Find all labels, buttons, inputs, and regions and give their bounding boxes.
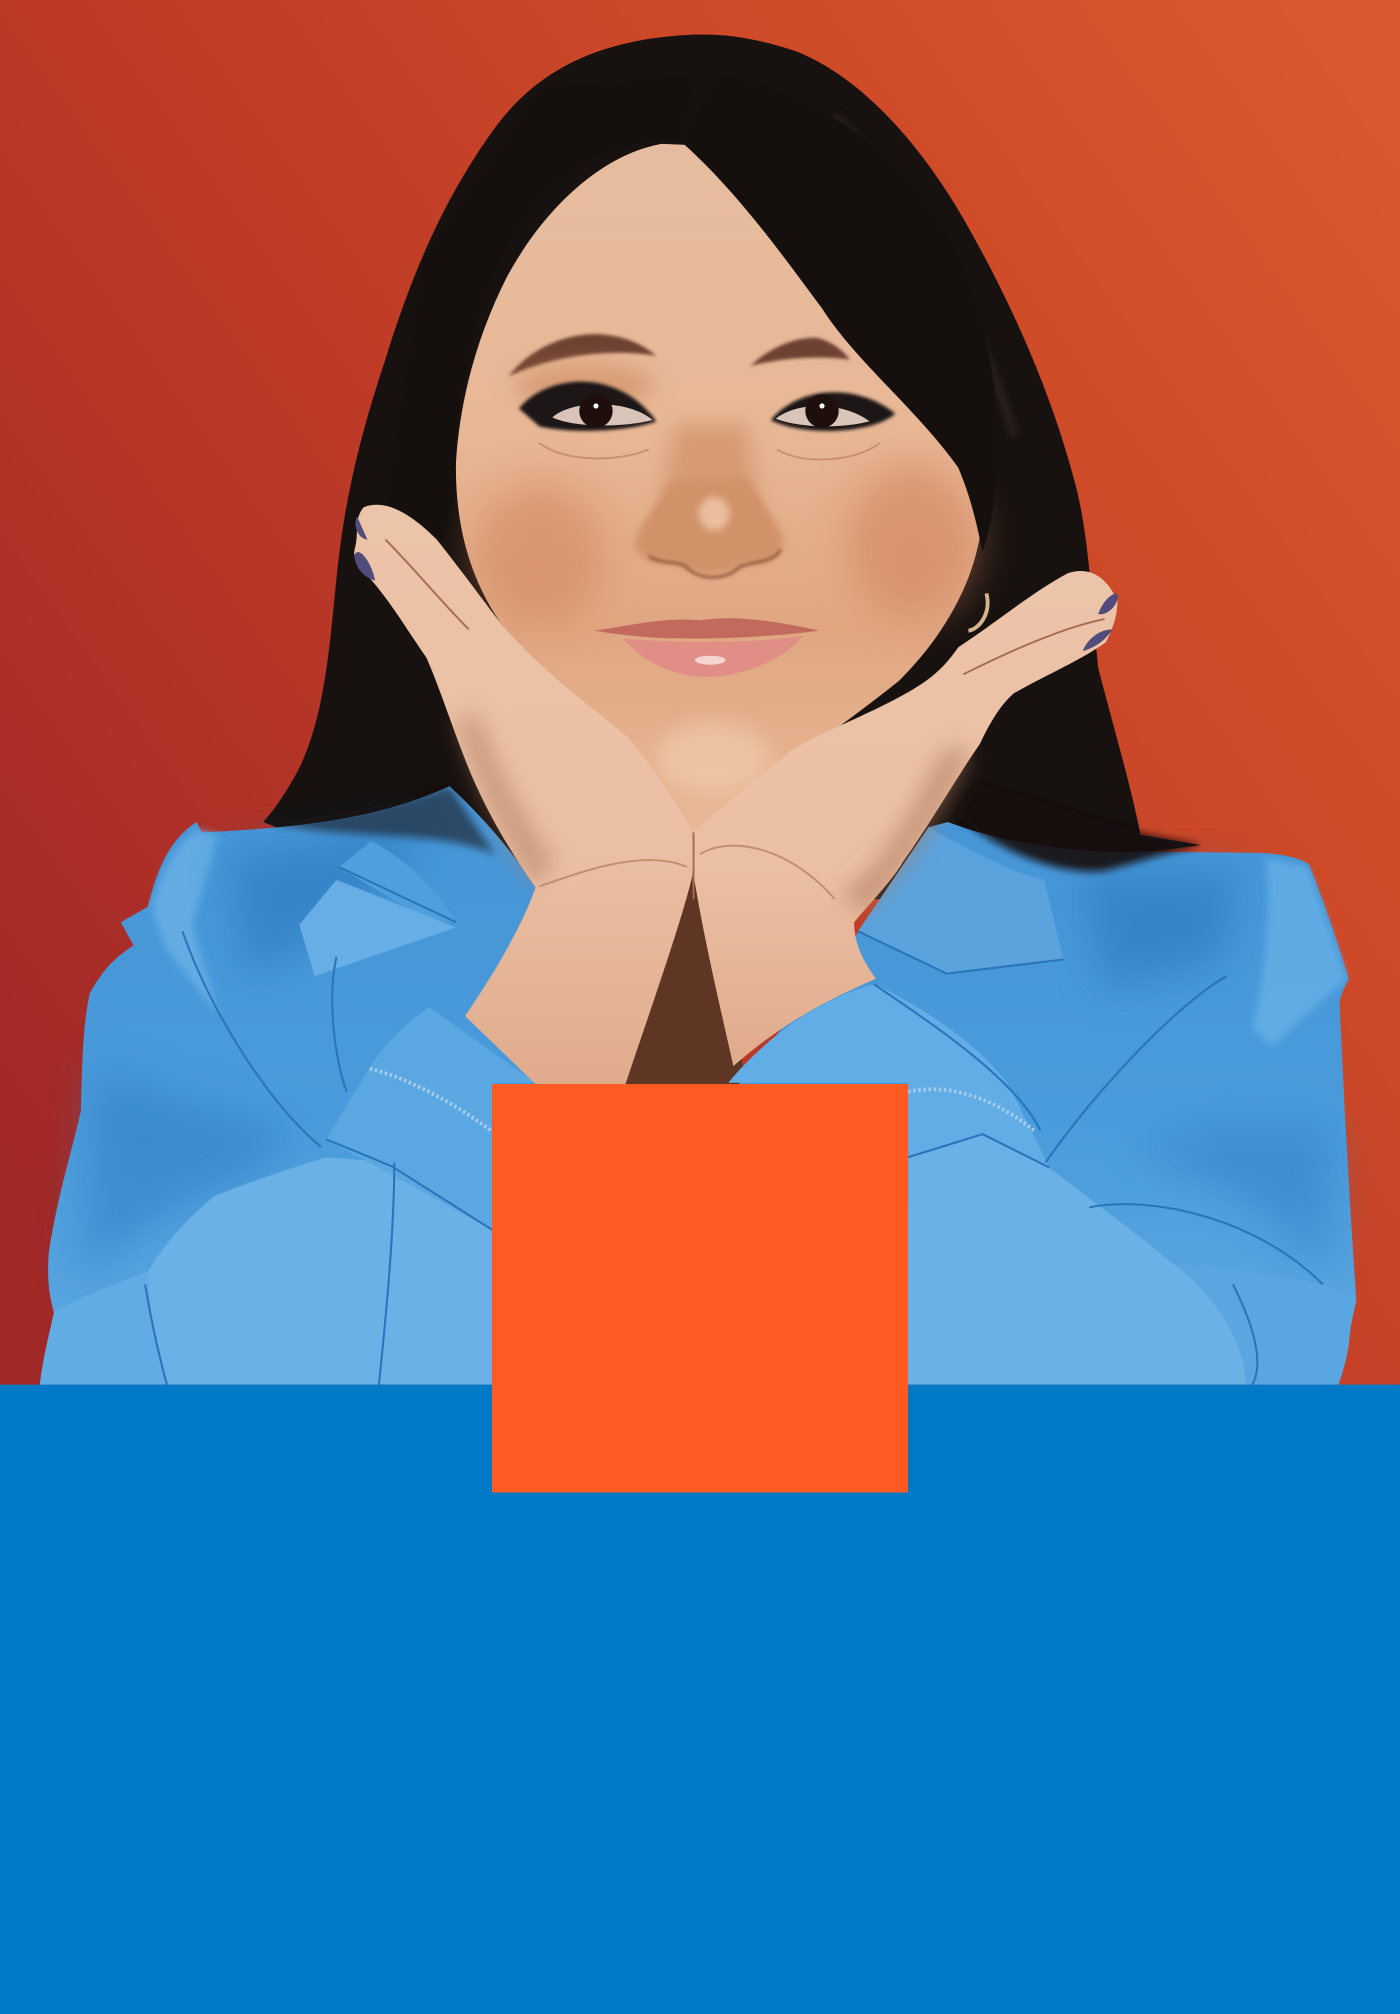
hand centre line (693, 832, 695, 899)
lips (595, 618, 819, 677)
eye bags (539, 443, 880, 460)
left lapel light patch (299, 880, 456, 976)
left brow (509, 334, 656, 376)
left cuff (326, 1007, 536, 1230)
cuff stitching (370, 1069, 1034, 1130)
lower right sleeve band (1170, 1261, 1356, 1385)
gradient background (0, 0, 1400, 1387)
nose bridge (661, 424, 758, 514)
woman portrait (40, 34, 1356, 1385)
shoulder shadows (231, 822, 430, 976)
earring (968, 593, 988, 631)
jacket body (40, 786, 1356, 1385)
left strands (270, 786, 494, 854)
light sleeve right (908, 1134, 1246, 1385)
left hand (354, 505, 693, 1084)
jacket (40, 786, 1356, 1385)
back of hand shading (841, 747, 967, 915)
orange square (492, 1084, 908, 1493)
blue base panel (0, 1385, 1400, 2014)
fringe (681, 77, 998, 552)
lower left sleeve band (40, 1272, 167, 1385)
jacket seams (145, 867, 1323, 1385)
eye shadow (514, 362, 655, 408)
sleeve shadows (77, 1066, 295, 1284)
finger line (385, 539, 469, 629)
left lapel (339, 841, 456, 922)
right brow (750, 338, 850, 366)
right strands (957, 784, 1201, 871)
wrist crease (700, 846, 835, 899)
eyebrows (509, 334, 850, 376)
right lapel (858, 827, 1063, 974)
nose (634, 424, 783, 577)
neck and chest (617, 873, 745, 1084)
right hand (693, 571, 1118, 1066)
nose tip (634, 478, 783, 574)
right cuff (728, 984, 1049, 1168)
nails (1098, 593, 1118, 614)
nails (354, 552, 375, 581)
wrist crease (539, 860, 687, 886)
face (456, 144, 983, 835)
chin light (655, 722, 771, 794)
hair highlights (416, 308, 443, 539)
light sleeve left (148, 1157, 493, 1385)
hair over shoulders (270, 784, 1201, 871)
hair (263, 34, 1201, 899)
cheek blush (475, 482, 604, 623)
eye left (519, 382, 656, 431)
shoulder light right (1252, 858, 1346, 1047)
eye right (771, 392, 895, 431)
back of hand shading (456, 713, 555, 886)
finger line (963, 619, 1105, 674)
shoulder light left (152, 830, 218, 1015)
